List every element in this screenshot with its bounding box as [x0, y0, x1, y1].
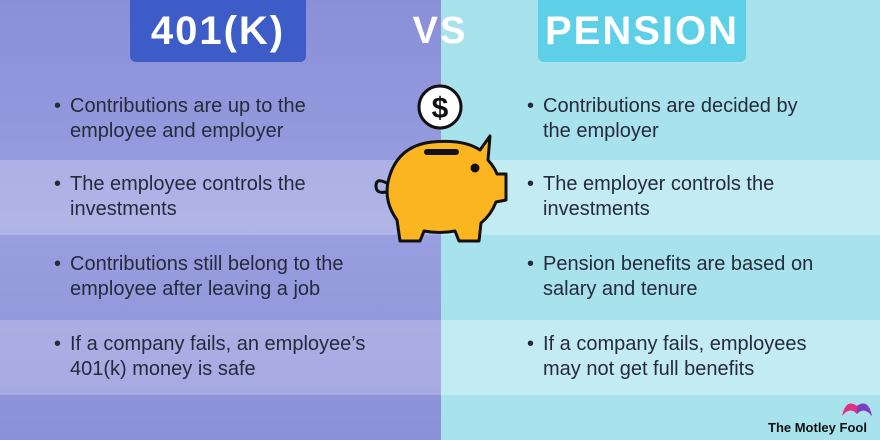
text: pension point 2	[543, 172, 774, 222]
text: 401k point 3: Contributions still belong to the	[70, 253, 344, 275]
icon: coin	[419, 86, 461, 128]
text: 401k point 4: If a company fails, an employee’s	[70, 333, 365, 355]
text: 401k point 2: The employee controls the	[70, 173, 306, 195]
text: pension point 3	[543, 252, 813, 302]
text: 401k point 4: 401(k) money is safe	[70, 358, 256, 380]
text: pension point 1: the employer	[543, 120, 659, 142]
text: pension point 4: If a company fails, employees	[543, 333, 806, 355]
text: pension point 2: investments	[543, 198, 650, 220]
panel: pension background	[441, 0, 880, 440]
text: 401k point 1: employee and employer	[70, 120, 283, 142]
icon: jester hat	[842, 404, 872, 416]
heading: PENSION: PENSION	[545, 9, 739, 53]
icon: piggy bank with coin	[374, 84, 508, 242]
text: pension point 2: The employer controls the	[543, 173, 774, 195]
text: 401k point 2	[70, 172, 306, 222]
text: pension point 4	[543, 332, 806, 382]
logo: The Motley Fool: The Motley Fool	[768, 420, 867, 435]
text: 401k point 2: investments	[70, 198, 177, 220]
text: 401k point 3	[70, 252, 344, 302]
panel: 401k background	[0, 0, 441, 440]
text: pension point 3: Pension benefits are based on	[543, 253, 813, 275]
icon: pig	[376, 136, 506, 241]
text: 401k point 3: employee after leaving a job	[70, 278, 320, 300]
text: pension point 1: Contributions are decided by	[543, 95, 798, 117]
text: 401k point 4	[70, 332, 365, 382]
heading: VS: VS	[413, 10, 467, 52]
text: pension point 1	[543, 94, 798, 144]
heading: PENSION	[538, 0, 746, 62]
text: 401k point 1	[70, 94, 306, 144]
logo: The Motley Fool	[768, 404, 872, 435]
heading: 401(K)	[130, 0, 306, 62]
text: 401k point 1: Contributions are up to the	[70, 95, 306, 117]
text: pension point 3: salary and tenure	[543, 278, 698, 300]
icon: coin: $	[432, 92, 449, 125]
text: pension point 4: may not get full benefits	[543, 358, 754, 380]
heading: 401(K): 401(K)	[151, 9, 285, 53]
